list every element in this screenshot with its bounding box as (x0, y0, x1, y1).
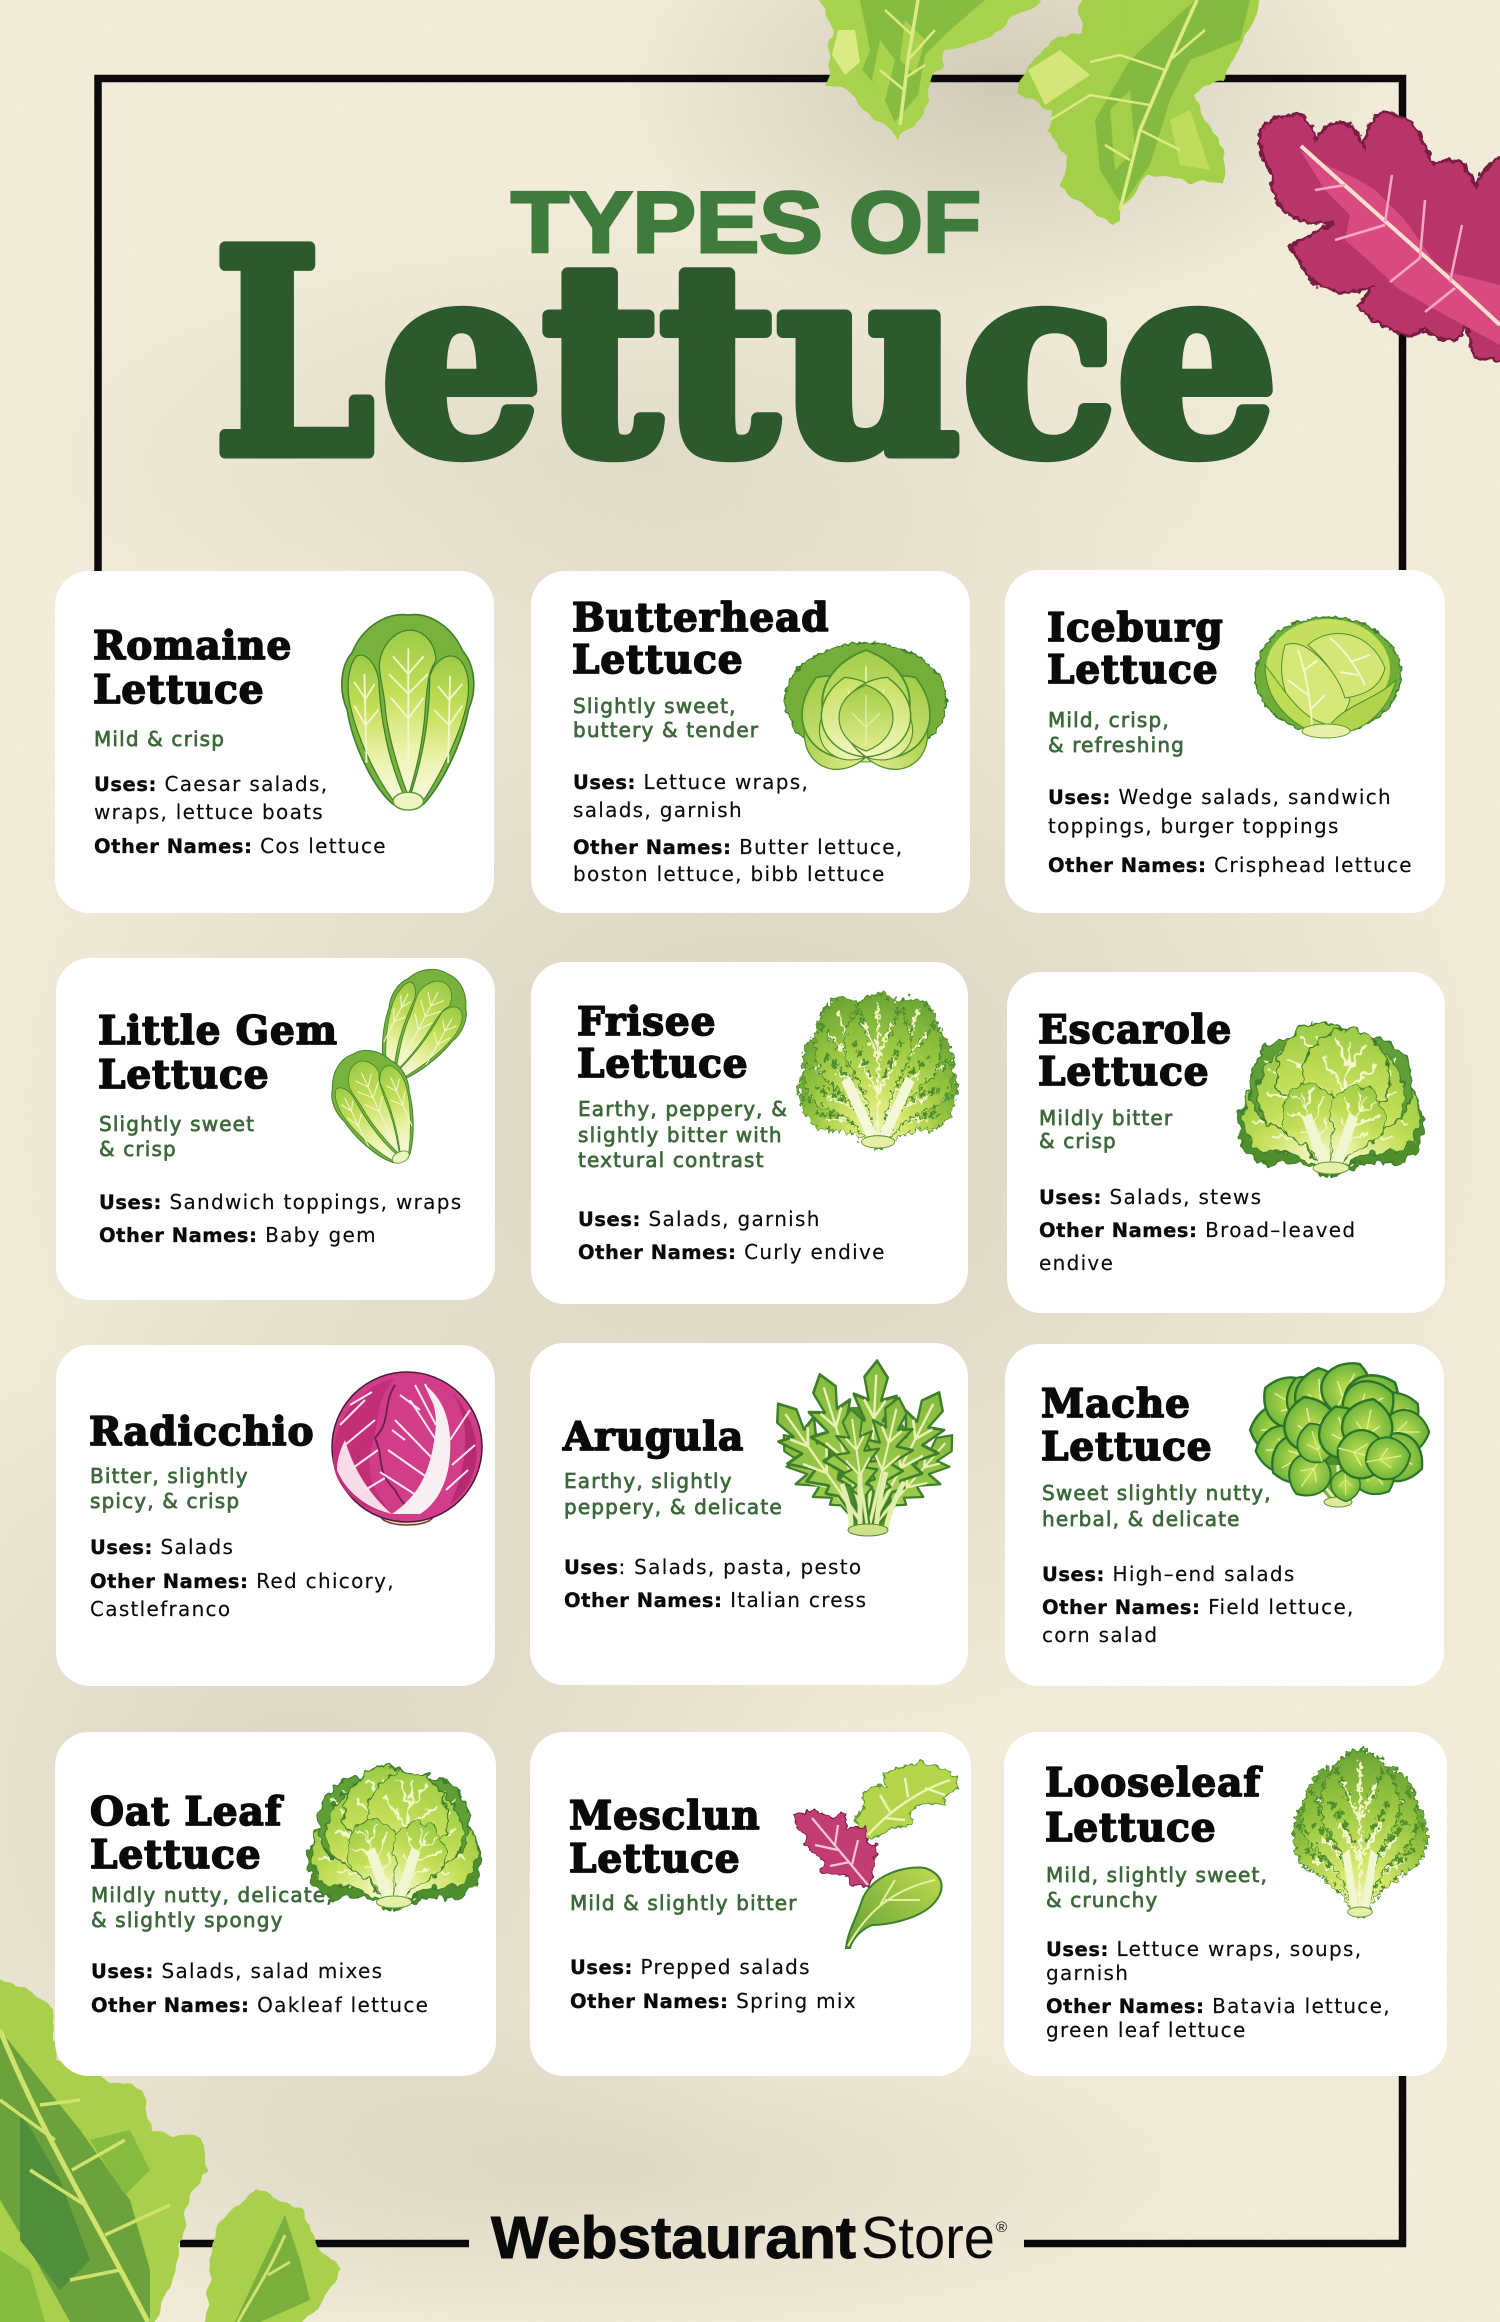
decorative leaf: top left green (813, 0, 1057, 141)
icon: radicchio (332, 1372, 482, 1525)
uses and other names: Arugula: Other Names: Italian cress (564, 1588, 867, 1612)
decorative leaf: red (1260, 112, 1500, 362)
decorative leaf: top right green (1016, 0, 1263, 223)
heading: Little Gem Lettuce: Little Gem (98, 1008, 338, 1054)
uses and other names: Escarole: endive (1039, 1251, 1114, 1275)
flavor: Arugula: Earthy, slightly (564, 1469, 733, 1493)
flavor: Oat Leaf: & slightly spongy (91, 1908, 284, 1932)
heading: Mesclun Lettuce: Mesclun (569, 1793, 761, 1839)
panel: Frisee Lettuce (531, 962, 969, 1304)
flavor: Little Gem: Slightly sweet (99, 1112, 255, 1136)
flavor: Frisee: textural contrast (578, 1148, 765, 1172)
flavor: Arugula: peppery, & delicate (564, 1495, 783, 1519)
panel: Arugula (530, 1343, 970, 1685)
heading: Mache Lettuce: Lettuce (1041, 1424, 1212, 1470)
heading: Butterhead Lettuce: Butterhead (572, 595, 829, 641)
icon: looseleaf lettuce (1280, 1750, 1440, 1931)
heading: Romaine Lettuce: Lettuce (93, 667, 264, 713)
icon: iceberg lettuce (1255, 617, 1401, 738)
uses and other names: Mesclun: Uses: Prepped salads (570, 1955, 811, 1979)
uses and other names: Mache: corn salad (1042, 1623, 1158, 1647)
uses and other names: Oat Leaf: Uses: Salads, salad mixes (91, 1959, 383, 1983)
icon: mesclun mix (795, 1762, 958, 1948)
flavor: Iceburg: & refreshing (1048, 733, 1185, 757)
uses and other names: Radicchio: Castlefranco (90, 1597, 231, 1621)
icon: frisee (787, 985, 969, 1171)
uses and other names: Romaine: wraps, lettuce boats (94, 800, 324, 824)
flavor: Escarole: Mildly bitter (1039, 1106, 1173, 1130)
uses and other names: Little Gem: Uses: Sandwich toppings, wraps (99, 1190, 462, 1214)
flavor: Frisee: slightly bitter with (578, 1123, 783, 1147)
title: Lettuce: L (214, 190, 374, 519)
uses and other names: Oat Leaf: Other Names: Oakleaf lettuce (91, 1993, 429, 2017)
heading: Looseleaf Lettuce: Lettuce (1045, 1805, 1216, 1851)
heading: Romaine Lettuce: Romaine (93, 623, 292, 669)
heading: Radicchio: Radicchio (89, 1409, 314, 1455)
uses and other names: Mache: Other Names: Field lettuce, (1042, 1595, 1355, 1619)
heading: Mache Lettuce: Mache (1041, 1381, 1191, 1427)
heading: Escarole Lettuce: Escarole (1038, 1007, 1232, 1053)
panel: Iceburg Lettuce (1005, 570, 1445, 913)
panel: Mache Lettuce (1005, 1344, 1444, 1686)
flavor: Iceburg: Mild, crisp, (1048, 708, 1170, 732)
title: Lettuce: ettuce (381, 206, 1278, 514)
logo: WebstaurantStore (491, 2205, 1007, 2271)
heading: Frisee Lettuce: Lettuce (577, 1041, 748, 1087)
uses and other names: Looseleaf: Other Names: Batavia lettuce, (1046, 1994, 1391, 2018)
heading: Oat Leaf Lettuce: Oat Leaf (90, 1789, 284, 1835)
uses and other names: Frisee: Other Names: Curly endive (578, 1240, 886, 1264)
logo: WebstaurantStore: Webstaurant (491, 2205, 856, 2271)
decorative leaf: bottom left (0, 1975, 209, 2322)
uses and other names: Looseleaf: Uses: Lettuce wraps, soups, (1046, 1937, 1362, 1961)
uses and other names: Frisee: Uses: Salads, garnish (578, 1207, 821, 1231)
heading: Arugula: Arugula (562, 1414, 744, 1460)
icon: romaine lettuce (342, 615, 474, 810)
uses and other names: Mache: Uses: High–end salads (1042, 1562, 1296, 1586)
flavor: Frisee: Earthy, peppery, & (578, 1097, 788, 1121)
uses and other names: Iceburg: Other Names: Crisphead lettuce (1048, 853, 1413, 877)
decorative leaf: bottom centre-left (206, 2190, 343, 2322)
heading: Butterhead Lettuce: Lettuce (572, 637, 743, 683)
flavor: Little Gem: & crisp (99, 1137, 177, 1161)
heading: Frisee Lettuce: Frisee (577, 999, 716, 1045)
uses and other names: Romaine: Uses: Caesar salads, (94, 772, 328, 796)
uses and other names: Iceburg: Uses: Wedge salads, sandwich (1048, 785, 1392, 809)
flavor: Romaine: Mild & crisp (94, 727, 225, 751)
logo: WebstaurantStore: Store (861, 2205, 995, 2271)
flavor: Looseleaf: Mild, slightly sweet, (1046, 1863, 1268, 1887)
logo: WebstaurantStore: ® (996, 2219, 1007, 2236)
panel: Escarole Lettuce (1007, 972, 1445, 1313)
uses and other names: Radicchio: Other Names: Red chicory, (90, 1569, 395, 1593)
heading: Oat Leaf Lettuce: Lettuce (90, 1832, 261, 1878)
uses and other names: Looseleaf: green leaf lettuce (1046, 2018, 1247, 2042)
flavor: Oat Leaf: Mildly nutty, delicate, (91, 1883, 334, 1907)
flavor: Escarole: & crisp (1039, 1129, 1117, 1153)
uses and other names: Butterhead: boston lettuce, bibb lettuce (573, 862, 886, 886)
uses and other names: Butterhead: Other Names: Butter lettuce, (573, 835, 903, 859)
heading: Escarole Lettuce: Lettuce (1038, 1049, 1209, 1095)
panel: Oat Leaf Lettuce (55, 1732, 496, 2076)
panel: Mesclun Lettuce (530, 1732, 971, 2076)
uses and other names: Radicchio: Uses: Salads (90, 1535, 234, 1559)
flavor: Mache: Sweet slightly nutty, (1042, 1481, 1272, 1505)
uses and other names: Little Gem: Other Names: Baby gem (99, 1223, 377, 1247)
heading: Looseleaf Lettuce: Looseleaf (1045, 1760, 1262, 1806)
panel: Little Gem Lettuce (56, 956, 495, 1300)
icon: mache (1250, 1352, 1432, 1507)
heading: Iceburg Lettuce: Iceburg (1047, 605, 1224, 651)
panel: Looseleaf Lettuce (1004, 1732, 1447, 2076)
heading: Mesclun Lettuce: Lettuce (569, 1836, 740, 1882)
uses and other names: Butterhead: salads, garnish (573, 798, 743, 822)
uses and other names: Looseleaf: garnish (1046, 1961, 1129, 1985)
title: Types of: TYPES OF (511, 175, 981, 271)
uses and other names: Butterhead: Uses: Lettuce wraps, (573, 770, 809, 794)
uses and other names: Escarole: Uses: Salads, stews (1039, 1185, 1262, 1209)
icon: arugula (756, 1359, 970, 1547)
uses and other names: Escarole: Other Names: Broad–leaved (1039, 1218, 1356, 1242)
icon: escarole (1223, 1017, 1439, 1205)
flavor: Radicchio: Bitter, slightly (90, 1464, 249, 1488)
uses and other names: Mesclun: Other Names: Spring mix (570, 1989, 857, 2013)
heading: Iceburg Lettuce: Lettuce (1047, 647, 1218, 693)
uses and other names: Iceburg: toppings, burger toppings (1048, 814, 1340, 838)
heading: Little Gem Lettuce: Lettuce (98, 1052, 269, 1098)
flavor: Mache: herbal, & delicate (1042, 1507, 1241, 1531)
icon: oat leaf lettuce (294, 1761, 494, 1938)
panel: Radicchio (56, 1345, 495, 1686)
flavor: Butterhead: buttery & tender (573, 718, 759, 742)
flavor: Mesclun: Mild & slightly bitter (570, 1891, 798, 1915)
uses and other names: Romaine: Other Names: Cos lettuce (94, 834, 387, 858)
flavor: Butterhead: Slightly sweet, (573, 694, 737, 718)
icon: little gem lettuce (317, 956, 482, 1179)
flavor: Looseleaf: & crunchy (1046, 1888, 1158, 1912)
panel: Romaine Lettuce (55, 571, 494, 913)
flavor: Radicchio: spicy, & crisp (90, 1489, 240, 1513)
uses and other names: Arugula: Uses: Salads, pasta, pesto (564, 1555, 862, 1579)
panel: Butterhead Lettuce (531, 571, 970, 913)
icon: butterhead lettuce (784, 643, 948, 782)
